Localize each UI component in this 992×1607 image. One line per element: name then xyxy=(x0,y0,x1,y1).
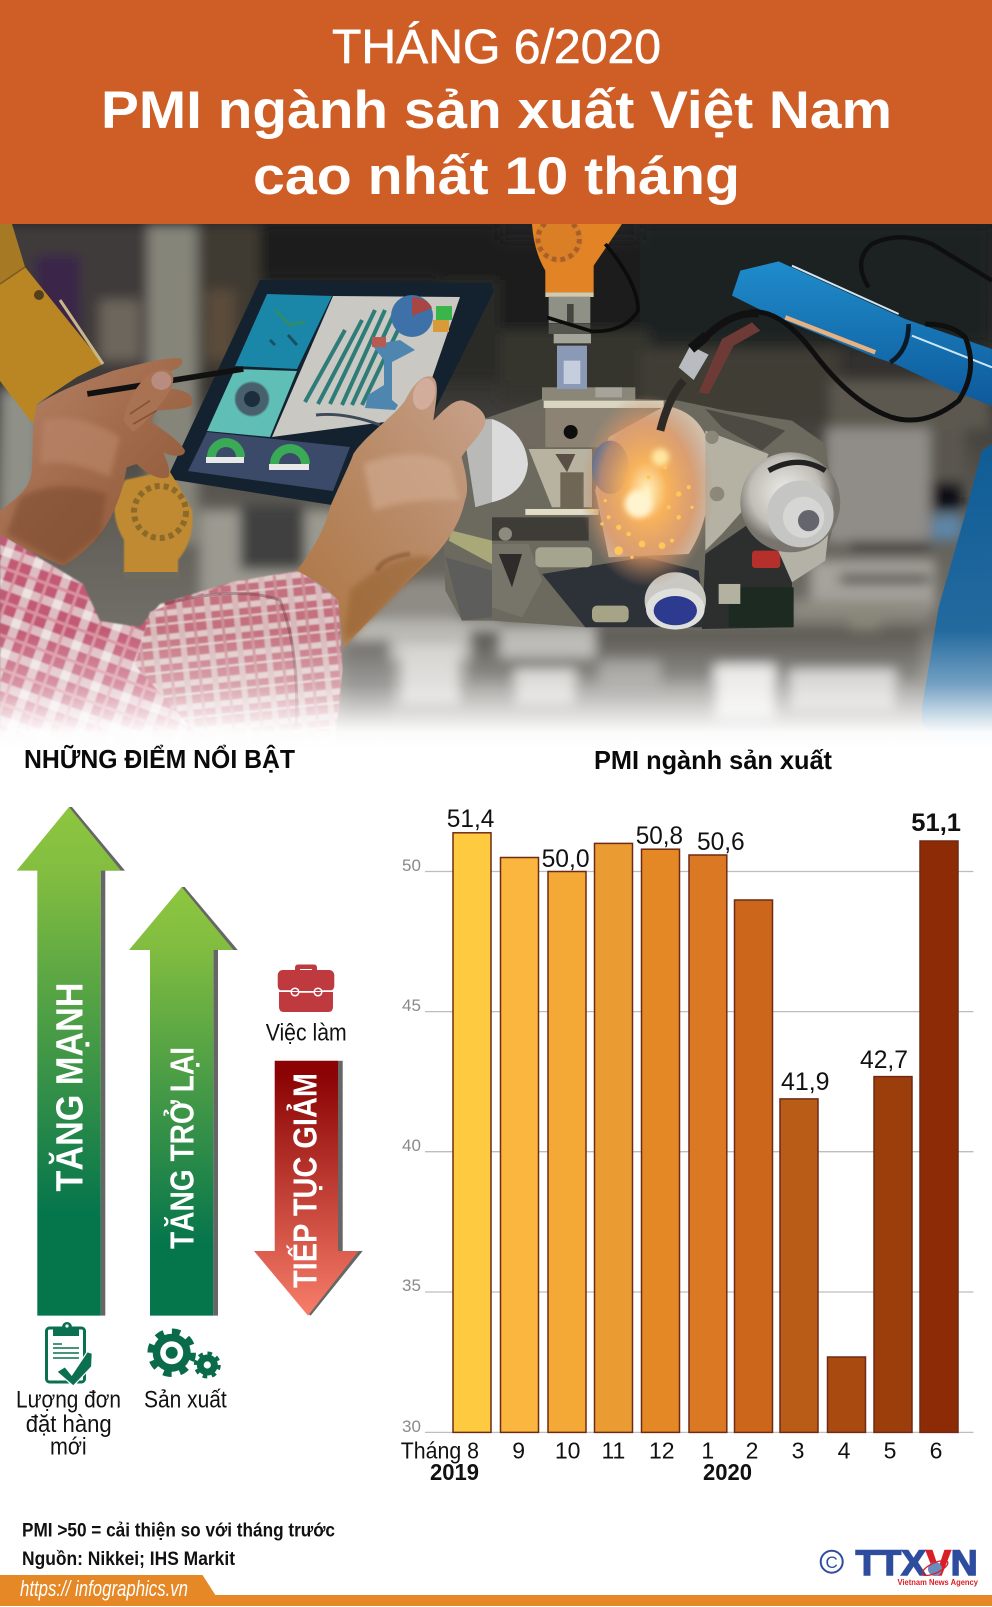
arrow label: TĂNG TRỞ LẠI xyxy=(163,1047,200,1249)
note: PMI definition: PMI >50 = cải thiện so với tháng trước xyxy=(22,1521,335,1542)
photo: hands with tablet and welding robots on engine xyxy=(0,215,992,750)
label: production: Sản xuất xyxy=(144,1387,227,1414)
x axis labels xyxy=(401,1438,942,1485)
header banner xyxy=(0,0,992,224)
icon: briefcase xyxy=(278,964,334,1012)
title line 3: cao nhất 10 tháng xyxy=(253,147,740,206)
arrow: employment keeps falling xyxy=(254,1061,363,1316)
value labels: 51,1 xyxy=(911,809,961,837)
title line 1: THÁNG 6/2020 xyxy=(332,21,661,74)
value labels: 51,4 xyxy=(447,805,494,833)
label: employment: Việc làm xyxy=(266,1020,347,1046)
arrow label: TĂNG MẠNH xyxy=(47,982,91,1192)
x axis labels: 3 xyxy=(792,1438,804,1464)
bar chart: PMI by month xyxy=(401,805,974,1485)
heading: chart: PMI ngành sản xuất xyxy=(594,745,832,775)
x axis labels: 11 xyxy=(601,1438,625,1464)
title line 2: PMI ngành sản xuất Việt Nam xyxy=(101,81,892,140)
value labels: 50,0 xyxy=(542,845,590,873)
value labels xyxy=(447,805,961,1096)
x axis labels: 1 xyxy=(701,1438,714,1464)
x axis labels: 5 xyxy=(884,1438,896,1464)
yellow robot arm left xyxy=(0,224,103,424)
right hand holding tablet xyxy=(297,376,486,647)
x axis labels: 2 xyxy=(746,1438,758,1464)
label: new orders: mới xyxy=(50,1433,87,1460)
y axis labels xyxy=(402,856,421,1436)
source: Nguồn: Nikkei; IHS Markit xyxy=(22,1549,236,1570)
arrow: production recovering xyxy=(129,887,238,1316)
icon: gears xyxy=(151,1332,219,1376)
y axis labels: 45 xyxy=(402,996,421,1015)
x axis labels: 6 xyxy=(930,1438,942,1464)
url: https:// infographics.vn xyxy=(20,1576,188,1601)
value labels: 50,6 xyxy=(697,828,745,856)
heading: highlights: NHỮNG ĐIỂM NỔI BẬT xyxy=(24,744,295,774)
icon: clipboard with check xyxy=(46,1322,92,1386)
left hand holding stylus xyxy=(0,358,243,566)
label: new orders: Lượng đơn xyxy=(16,1387,121,1414)
arrow label: TIẾP TỤC GIẢM xyxy=(287,1073,324,1288)
y axis labels: 35 xyxy=(402,1276,421,1295)
value labels: 42,7 xyxy=(860,1046,908,1074)
y axis labels: 40 xyxy=(402,1136,421,1155)
white fade at bottom of photo xyxy=(0,630,992,750)
logo: TTXVN: TTXVN xyxy=(856,1544,978,1583)
shirt sleeves xyxy=(0,534,342,749)
x axis labels: 12 xyxy=(649,1438,675,1464)
value labels: 41,9 xyxy=(781,1068,830,1096)
x axis labels: 9 xyxy=(512,1438,525,1464)
x axis labels: 2019 xyxy=(430,1459,479,1485)
x axis labels: Tháng 8 xyxy=(401,1438,479,1464)
orange robot head and shaft xyxy=(532,215,638,389)
footer bar with url tab xyxy=(0,1575,992,1606)
logo: TTXVN: C xyxy=(826,1553,838,1572)
label: new orders xyxy=(16,1387,121,1460)
orange joint behind hand xyxy=(114,470,192,579)
blue robot arm with welding torch xyxy=(660,237,992,744)
logo: TTXVN: Vietnam News Agency xyxy=(898,1577,978,1587)
logo: TTXVN xyxy=(821,1544,978,1587)
x axis labels: 10 xyxy=(555,1438,580,1464)
label: new orders: đặt hàng xyxy=(26,1411,112,1438)
tablet xyxy=(170,280,494,505)
arrow: new orders strongly up xyxy=(17,807,125,1316)
y axis labels: 50 xyxy=(402,856,421,875)
y axis labels: 30 xyxy=(402,1417,421,1436)
value labels: 50,8 xyxy=(636,822,683,850)
x axis labels: 2020 xyxy=(703,1459,752,1485)
x axis labels: 4 xyxy=(838,1438,851,1464)
engine under welding xyxy=(442,387,840,631)
bars xyxy=(453,833,958,1432)
